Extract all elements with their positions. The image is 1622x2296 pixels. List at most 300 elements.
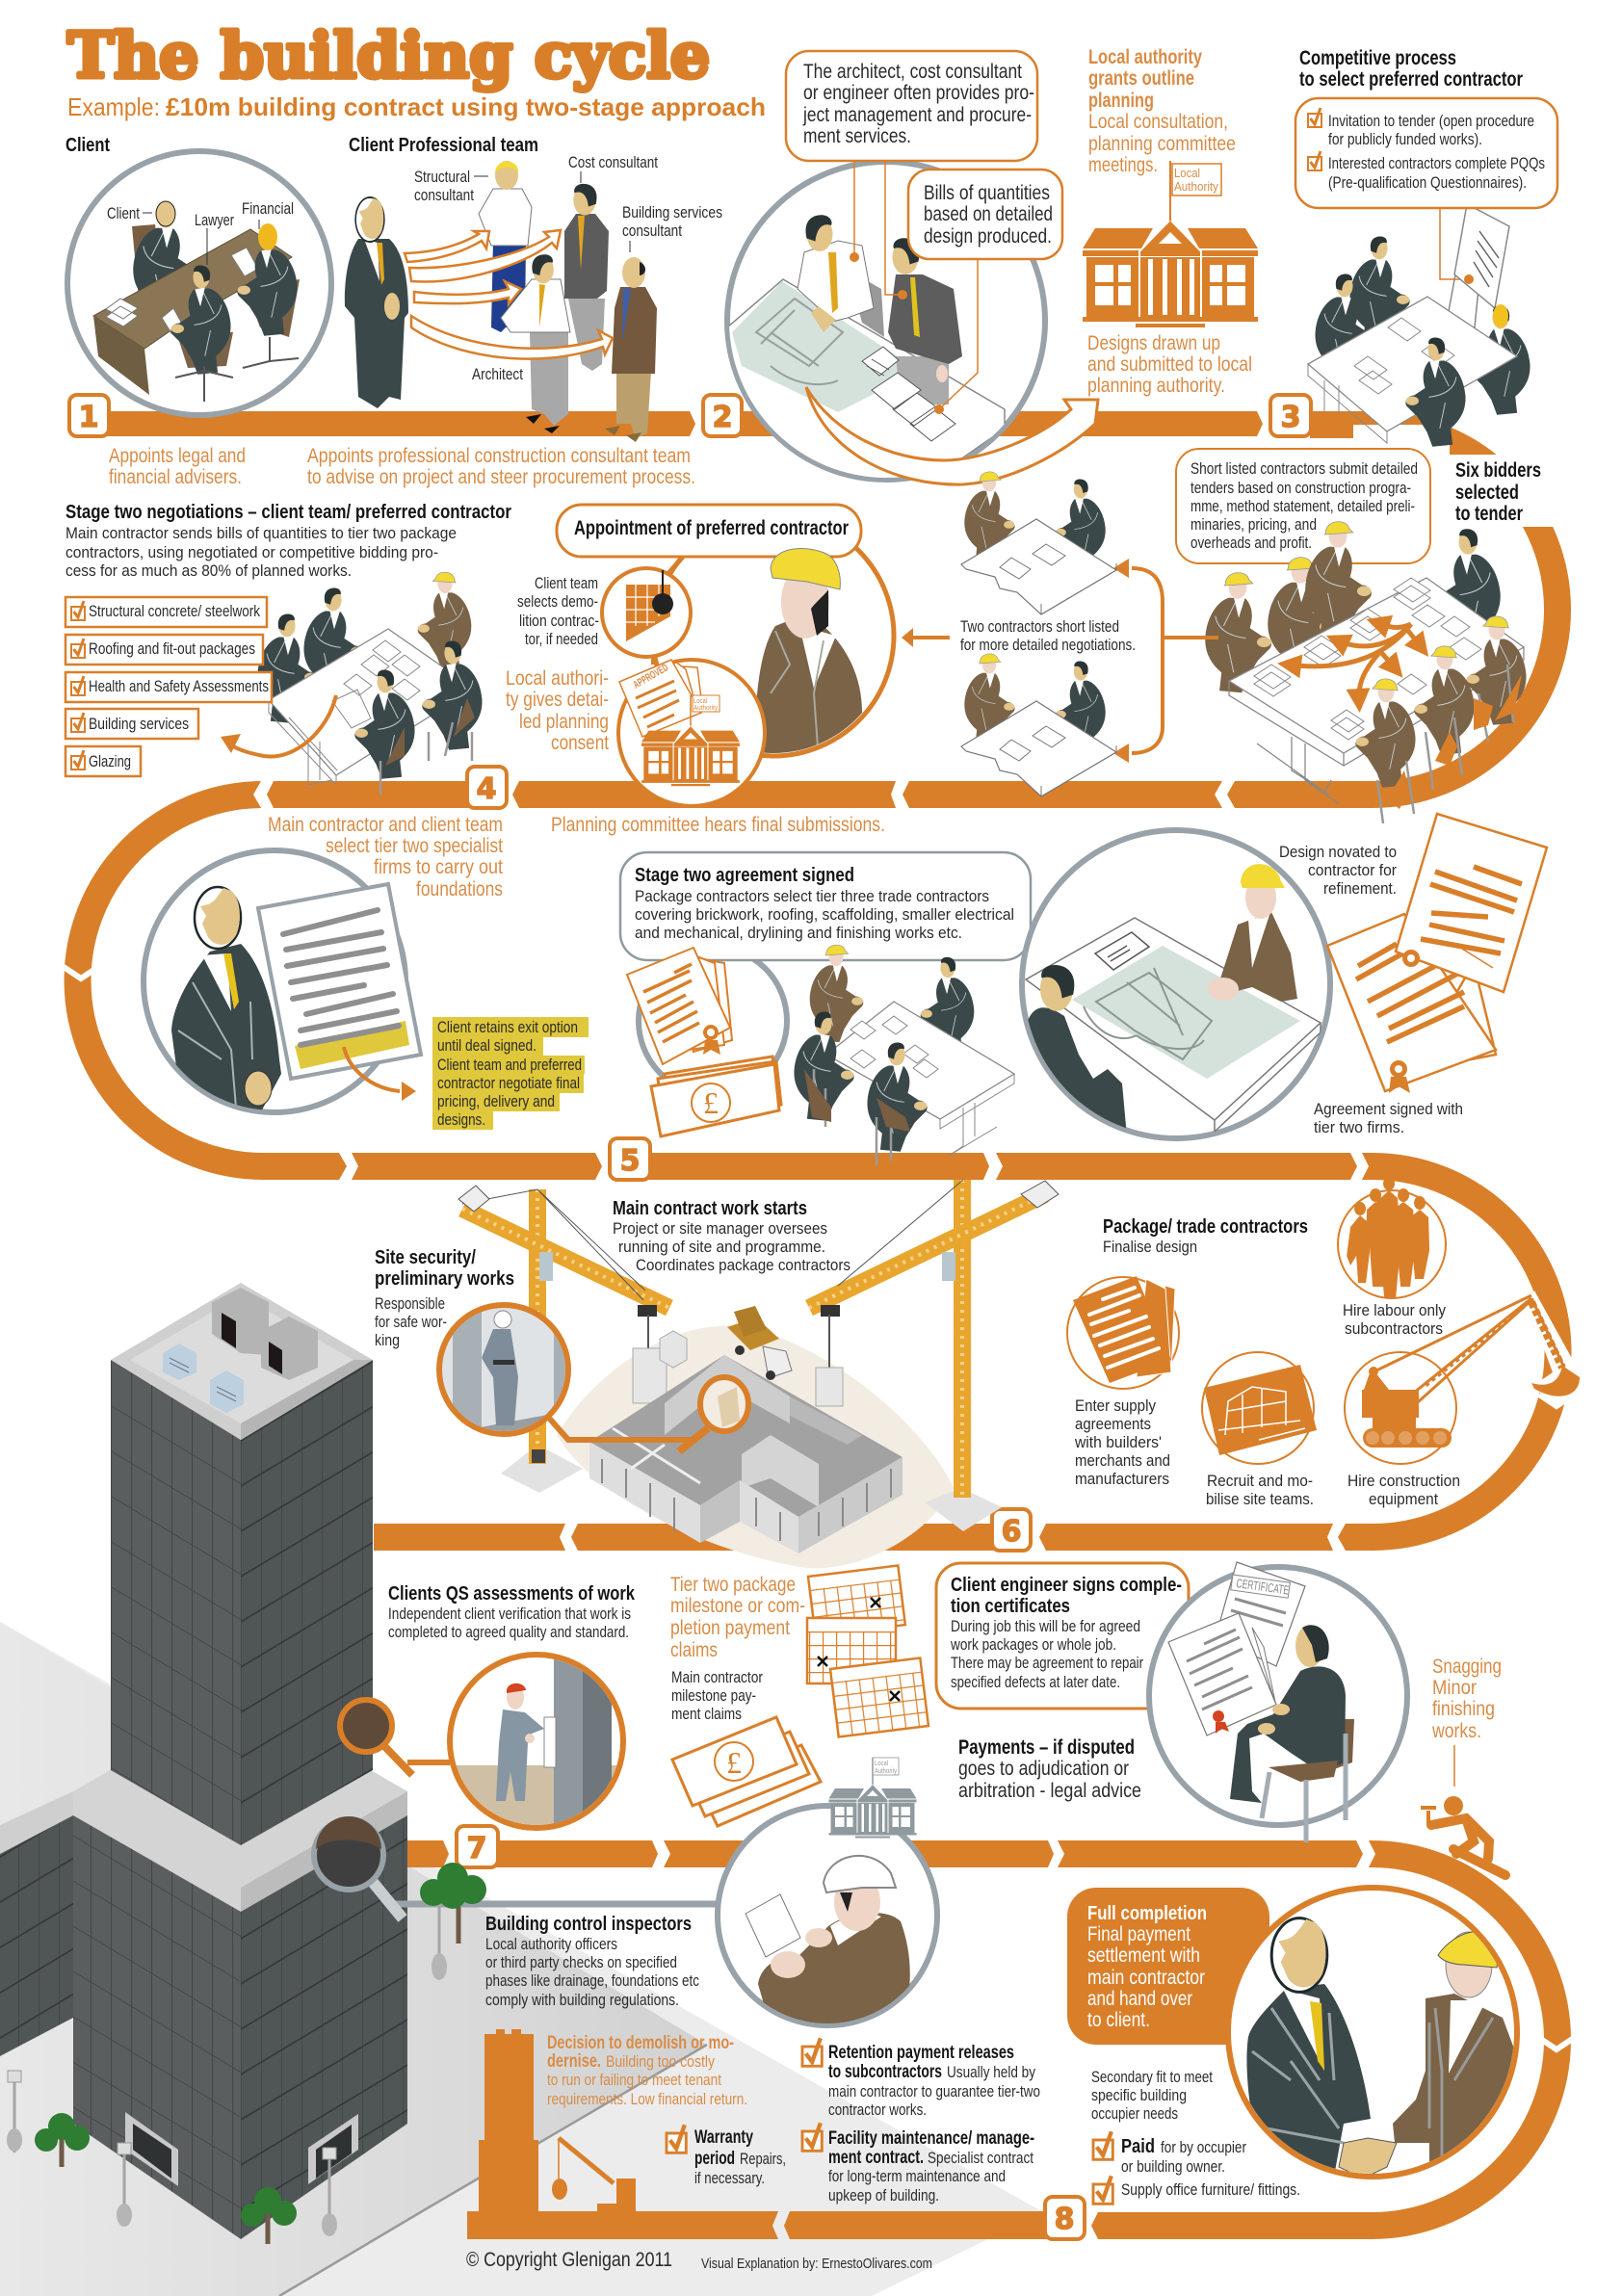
text: local authority: meetings. xyxy=(1088,154,1158,176)
text: design novated: refinement. xyxy=(1323,879,1397,898)
callout: short listed tenders: minaries, pricing, and xyxy=(1190,515,1317,534)
text: designs submitted: Designs drawn up xyxy=(1087,332,1220,354)
person: client handshake xyxy=(1246,1918,1371,2177)
arrow: process to step 3 xyxy=(806,387,1098,484)
text: facility maintenance: Facility maintenance/ manage- xyxy=(828,2128,1034,2149)
text: agreement signed xyxy=(1314,1100,1463,1136)
text: retention payment: to subcontractors xyxy=(828,2062,942,2082)
person: client standing xyxy=(345,197,408,408)
text: snagging: finishing xyxy=(1432,1698,1495,1720)
handshake xyxy=(1339,2138,1397,2179)
callout: exit option highlight: designs. xyxy=(437,1110,485,1129)
text: local authority: grants outline xyxy=(1088,67,1194,90)
arrow: negotiation outcome xyxy=(221,695,336,757)
icon: grey town hall xyxy=(828,1758,917,1838)
roof with plant xyxy=(111,1283,373,1440)
icon: town hall with flag: Authority xyxy=(1174,179,1218,194)
crane: right xyxy=(809,1180,1059,1531)
text: tier two milestone claims xyxy=(670,1574,805,1723)
text: hire equipment: equipment xyxy=(1369,1490,1438,1508)
client labels: Client xyxy=(107,204,140,222)
client labels xyxy=(107,199,294,265)
text: clients QS: Clients QS assessments of work xyxy=(388,1583,636,1605)
text: retention payment xyxy=(802,2038,1040,2119)
panel: negotiation table xyxy=(221,572,483,795)
text: retention payment: contractor works. xyxy=(828,2100,927,2119)
icon: flip chart xyxy=(1445,204,1517,390)
text: local authority consent: Local authori- xyxy=(506,667,609,690)
text: decision to demolish: dernise. xyxy=(547,2051,601,2072)
text: appoints advisers: Appoints legal and xyxy=(109,445,246,467)
text: supply agreements: manufacturers xyxy=(1075,1470,1169,1488)
text: designs submitted: planning authority. xyxy=(1087,375,1225,397)
text: select tier two: Main contractor and client team xyxy=(268,814,503,836)
text: local authority: Local consultation, xyxy=(1088,111,1228,133)
panel: client with contract xyxy=(144,850,421,1117)
heading: six bidders: selected xyxy=(1455,482,1519,504)
text: appoints advisers xyxy=(109,445,246,488)
text: site security: king xyxy=(375,1331,400,1349)
icon: planning consent circle: Local xyxy=(693,698,707,705)
circle: site security xyxy=(439,1300,573,1445)
person: structural consultant xyxy=(479,161,532,332)
text: supply agreements: agreements xyxy=(1075,1415,1151,1433)
text: retention payment: main contractor to guarantee tier-two xyxy=(828,2082,1040,2100)
heading: six bidders: Six bidders xyxy=(1455,459,1541,482)
text: tier two milestone claims: Tier two package xyxy=(670,1574,796,1596)
text: appoints consultant team xyxy=(307,445,695,488)
text: hire equipment: Hire construction xyxy=(1347,1472,1460,1490)
step 7 badge xyxy=(457,1826,498,1867)
text: local authority consent xyxy=(506,667,609,754)
panel: competitive meeting: for publicly funded works). xyxy=(1328,130,1482,148)
text box: final settlement: to client. xyxy=(1087,2009,1150,2031)
text: tier two milestone claims: ment claims xyxy=(671,1705,742,1723)
callout: exit option highlight: Client retains exit option xyxy=(437,1018,578,1036)
callout: exit option highlight: pricing, delivery and xyxy=(437,1092,555,1110)
text: warranty period xyxy=(667,2125,786,2187)
text: two contractors xyxy=(960,617,1136,654)
text: tier two milestone claims: milestone or com- xyxy=(670,1595,805,1617)
text: site security: Responsible xyxy=(375,1294,445,1313)
subtitle: Example: xyxy=(67,92,160,121)
entrances xyxy=(125,2112,358,2186)
text: select tier two: firms to carry out xyxy=(374,856,503,878)
text: payments disputed: arbitration - legal advice xyxy=(958,1780,1141,1802)
text: local authority xyxy=(1088,46,1236,176)
callout: client engineer signs: tion certificates xyxy=(951,1596,1070,1617)
checklist: packages: Roofing and fit-out packages xyxy=(89,639,255,658)
text: client team selects demolition: tor, if needed xyxy=(525,630,598,648)
text: warranty period: if necessary. xyxy=(694,2169,765,2187)
icon: demolition circle xyxy=(602,568,691,657)
panel: competitive meeting xyxy=(1295,98,1557,447)
text: main contract work starts: Main contract work starts xyxy=(613,1198,807,1219)
truck xyxy=(727,1306,792,1380)
icon: snagging worker xyxy=(1421,1745,1505,1875)
text: recruit teams: bilise site teams. xyxy=(1206,1490,1314,1508)
scene: lower negotiation xyxy=(961,654,1116,796)
text: building control inspectors: comply with building regulations. xyxy=(485,1991,679,2009)
text: building control inspectors xyxy=(485,1914,699,2009)
person: cost consultant xyxy=(564,184,609,371)
icon: calendars xyxy=(807,1566,929,1736)
certificate back: CERTIFICATE xyxy=(1236,1576,1290,1598)
step 6 badge xyxy=(992,1509,1031,1551)
circle: QS inspector xyxy=(443,1652,626,1835)
checklist: packages xyxy=(65,597,272,776)
arrows: short listing xyxy=(902,559,1218,763)
callout: architect role xyxy=(786,51,1037,300)
icon: contract pages xyxy=(627,948,732,1064)
building under construction xyxy=(589,1355,903,1553)
text: facility maintenance xyxy=(802,2123,1034,2205)
crane: left xyxy=(458,1186,669,1493)
text box: final settlement xyxy=(1067,1888,1269,2045)
text: building control inspectors: phases like drainage, foundations etc xyxy=(485,1971,699,1990)
text box: final settlement: main contractor xyxy=(1087,1967,1205,1989)
step 5 badge xyxy=(610,1138,650,1180)
arrow: to exit option xyxy=(344,1047,416,1101)
icon: planning consent circle: Authority xyxy=(693,705,718,712)
panel: engineer with certificates xyxy=(1149,1562,1407,1842)
text: main contract work starts: Coordinates package contractors xyxy=(636,1256,850,1274)
callout: appointment of preferred contractor: Appointment of preferred contractor xyxy=(574,517,849,539)
cycle ribbon xyxy=(64,411,1580,2239)
icon: construction equipment xyxy=(1345,1291,1580,1464)
text: tier two milestone claims: claims xyxy=(670,1639,718,1661)
callout: architect role: ment services. xyxy=(803,125,911,147)
text: select tier two xyxy=(268,814,503,900)
heading: stage two negotiations: cess for as much as 80% of planned works. xyxy=(65,561,352,580)
text: recruit teams xyxy=(1206,1472,1314,1508)
text: supply agreements: with builders' xyxy=(1074,1433,1162,1451)
team labels: Architect xyxy=(472,365,523,383)
callout: bills of quantities: Bills of quantities xyxy=(924,182,1050,204)
heading: six bidders xyxy=(1455,459,1541,525)
text box: final settlement: Full completion xyxy=(1087,1903,1207,1924)
callout: short listed tenders: mme, method statement, detailed preli- xyxy=(1190,497,1415,515)
checklist: packages: Building services xyxy=(89,715,189,733)
text: decision to demolish: requirements. Low financial return. xyxy=(547,2090,747,2108)
text: decision to demolish xyxy=(547,2033,747,2108)
footer credits: © Copyright Glenigan 2011 xyxy=(466,2249,672,2271)
text: package trade contractors: Finalise design xyxy=(1103,1238,1197,1256)
text: building control inspectors: or third party checks on specified xyxy=(485,1953,677,1971)
icon: banknotes xyxy=(651,1057,781,1136)
text: payments disputed: Payments – if disputed xyxy=(958,1736,1135,1759)
text: decision to demolish: Building too costly xyxy=(606,2052,715,2071)
text: warranty period: Repairs, xyxy=(740,2150,786,2168)
text: client team selects demolition: selects demo- xyxy=(517,592,598,611)
person: architect xyxy=(501,254,570,433)
text: agreement signed: tier two firms. xyxy=(1314,1118,1404,1136)
text: supply agreements xyxy=(1074,1396,1170,1488)
text: clients QS: completed to agreed quality and standard. xyxy=(388,1623,629,1641)
step 2 badge: 2 xyxy=(713,401,732,434)
text: local authority: planning committee xyxy=(1088,133,1236,155)
text: package trade contractors: Package/ trade contractors xyxy=(1103,1216,1308,1238)
person: white shirt engineer xyxy=(798,215,884,337)
panel: stage two agreement: Stage two agreement signed xyxy=(635,865,854,886)
callout: architect role: The architect, cost consultant xyxy=(803,61,1022,83)
text: local authority consent: led planning xyxy=(519,711,609,733)
text: select tier two: select tier two specialist xyxy=(326,835,503,857)
panel: building control inspector xyxy=(718,1806,937,2027)
text: two contractors: for more detailed negotiations. xyxy=(960,636,1136,654)
checklist: packages: Glazing xyxy=(89,752,131,770)
heading: stage two negotiations: Main contractor sends bills of quantities to tier two package xyxy=(65,524,457,542)
text: building control inspectors: Building control inspectors xyxy=(485,1914,692,1935)
arrows: appoints team xyxy=(405,230,613,359)
contractor head with hard hat xyxy=(771,549,840,639)
step 1 badge xyxy=(69,395,109,436)
heading: competitive process: Competitive process xyxy=(1299,47,1456,69)
text: appoints advisers: financial advisers. xyxy=(109,466,242,488)
icon: banknotes payment xyxy=(672,1717,821,1826)
text: appoints consultant team: to advise on project and steer procurement process. xyxy=(307,466,695,488)
text: retention payment: Usually held by xyxy=(947,2063,1035,2081)
lens: QS assessment xyxy=(340,1700,450,1775)
text: client team selects demolition: lition contrac- xyxy=(519,612,599,630)
icon: contract document xyxy=(258,884,421,1079)
text: snagging: Minor xyxy=(1432,1677,1477,1699)
text box: final settlement: Final payment xyxy=(1087,1923,1190,1945)
text: main contract work starts xyxy=(613,1198,850,1274)
text: design novated xyxy=(1279,843,1397,898)
text: package trade contractors xyxy=(1103,1216,1308,1256)
scene: signing table xyxy=(794,945,1014,1165)
panel: stage two agreement: and mechanical, drylining and finishing works etc. xyxy=(635,924,962,942)
text: planning committee: Planning committee hears final submissions. xyxy=(551,814,885,836)
step 2 badge xyxy=(703,395,742,436)
text: supply agreements: Enter supply xyxy=(1075,1396,1156,1415)
text: clients QS: Independent client verification that work is xyxy=(388,1605,631,1623)
team labels xyxy=(414,153,722,383)
panel: client professional team xyxy=(345,153,722,442)
callout: short listed tenders xyxy=(1176,449,1430,563)
text box: final settlement: settlement with xyxy=(1087,1944,1200,1967)
panel: competitive meeting: Interested contractors complete PQQs xyxy=(1328,154,1545,172)
callout: architect role: or engineer often provides pro- xyxy=(803,82,1034,104)
isometric ground xyxy=(0,1622,1043,2296)
callout: exit option highlight: Client team and preferred xyxy=(437,1056,582,1074)
step 8 badge: 8 xyxy=(1055,2203,1074,2236)
subtitle: £10m building contract using two-stage approach xyxy=(166,92,766,121)
panel: preferred contractor bust xyxy=(654,547,896,759)
text: agreement signed: Agreement signed with xyxy=(1314,1100,1463,1118)
text: local authority: planning xyxy=(1088,90,1154,112)
scene: upper negotiation xyxy=(961,472,1116,614)
heading: stage two negotiations xyxy=(65,502,511,580)
text: payments disputed: goes to adjudication or xyxy=(958,1758,1129,1780)
callout: bills of quantities xyxy=(908,170,1062,414)
street trees and lamps xyxy=(7,1863,486,2244)
text: recruit teams: Recruit and mo- xyxy=(1207,1472,1313,1490)
step 8 badge xyxy=(1045,2197,1085,2239)
person: contractor handshake xyxy=(1393,1932,1515,2162)
text: facility maintenance: Specialist contract xyxy=(928,2149,1033,2167)
text: secondary fit xyxy=(1091,2068,1213,2123)
callout: short listed tenders: tenders based on construction progra- xyxy=(1190,479,1411,497)
panel: stage two agreement: Package contractors select tier three trade contractors xyxy=(635,887,989,905)
lens: building control xyxy=(314,1816,722,1918)
client labels: Lawyer xyxy=(195,211,234,229)
icon: demolition of building xyxy=(479,2029,636,2215)
heading: six bidders: to tender xyxy=(1455,503,1523,525)
panel: tender table xyxy=(1205,522,1527,823)
text: design novated: Design novated to xyxy=(1279,843,1397,861)
team labels: Structural xyxy=(414,168,470,186)
lens: site detail xyxy=(547,1377,748,1451)
text: snagging: works. xyxy=(1431,1720,1481,1742)
text: decision to demolish: Decision to demolish or mo- xyxy=(547,2033,734,2053)
text: hire labour xyxy=(1343,1301,1446,1338)
text: designs submitted: and submitted to local xyxy=(1087,353,1252,376)
team labels: consultant xyxy=(414,186,474,204)
text: secondary fit: specific building xyxy=(1091,2086,1187,2104)
text: main contract work starts: running of site and programme. xyxy=(618,1238,825,1256)
certificate back xyxy=(1216,1562,1305,1666)
callout: client engineer signs: During job this will be for agreed xyxy=(951,1617,1140,1635)
panel: full completion xyxy=(1067,1888,1517,2179)
checklist: paid and supply: Supply office furniture/ fittings. xyxy=(1121,2180,1300,2199)
text: decision to demolish: to run or failing to meet tenant xyxy=(547,2071,721,2089)
team labels: consultant xyxy=(622,222,682,240)
icon: signed agreements xyxy=(1327,814,1547,1093)
panel: competitive meeting: Invitation to tender (open procedure xyxy=(1328,112,1534,130)
icon: banknotes payment: £ xyxy=(726,1745,742,1780)
panel: competitive meeting: (Pre-qualification Questionnaires). xyxy=(1328,173,1527,192)
footer credits: Visual Explanation by: ErnestoOlivares.com xyxy=(701,2256,932,2272)
text: two contractors: Two contractors short listed xyxy=(960,617,1119,636)
text: client team selects demolition xyxy=(517,574,599,648)
text: warranty period: period xyxy=(694,2149,735,2169)
text: secondary fit: occupier needs xyxy=(1091,2104,1178,2123)
text: supply agreements: merchants and xyxy=(1075,1451,1170,1470)
text: select tier two: foundations xyxy=(416,878,503,900)
text: local authority: Local authority xyxy=(1088,46,1202,68)
callout: client engineer signs xyxy=(936,1563,1189,1709)
step 4 badge: 4 xyxy=(477,772,496,806)
building: tower xyxy=(73,1283,407,2239)
callout: client engineer signs: specified defects at later date. xyxy=(951,1673,1120,1691)
callout: bills of quantities: design produced. xyxy=(924,225,1052,248)
text: secondary fit: Secondary fit to meet xyxy=(1091,2068,1213,2086)
checklist: packages: Structural concrete/ steelwork xyxy=(89,602,260,620)
panel: stage two agreement xyxy=(620,852,1031,1165)
callout: exit option highlight: contractor negotiate final xyxy=(437,1074,580,1092)
text: payments disputed xyxy=(958,1736,1141,1802)
client labels: Financial xyxy=(242,199,294,218)
text: retention payment: Retention payment releases xyxy=(828,2043,1014,2063)
person: grey jacket consultant xyxy=(888,238,962,404)
callout: short listed tenders: Short listed contractors submit detailed xyxy=(1190,459,1418,478)
icon: planning consent circle xyxy=(618,657,765,806)
step 1 badge: 1 xyxy=(79,401,98,434)
text: facility maintenance: ment contract. xyxy=(828,2148,924,2168)
text: hire equipment xyxy=(1347,1472,1460,1508)
text: site security: Site security/ xyxy=(375,1247,476,1268)
step 7 badge: 7 xyxy=(467,1832,486,1866)
checklist: paid and supply: or building owner. xyxy=(1121,2157,1225,2176)
callout: architect role: ject management and procure- xyxy=(802,104,1032,126)
icon: supply documents xyxy=(1067,1276,1179,1389)
callout: exit option highlight xyxy=(432,1017,589,1130)
callout: client engineer signs: work packages or whole job. xyxy=(950,1635,1116,1654)
icon: grey town hall: Local xyxy=(875,1761,888,1767)
checklist: packages: Health and Safety Assessments xyxy=(89,677,269,695)
footer credits xyxy=(466,2249,932,2272)
text: main contract work starts: Project or site manager oversees xyxy=(613,1219,827,1238)
heading: competitive process xyxy=(1299,47,1523,91)
text: local authority consent: consent xyxy=(551,732,609,754)
panel: stage two agreement: covering brickwork, roofing, scaffolding, smaller electrical xyxy=(635,905,1014,924)
text: snagging xyxy=(1431,1656,1502,1742)
text: hire labour: Hire labour only xyxy=(1343,1301,1446,1319)
text: hire labour: subcontractors xyxy=(1345,1319,1443,1338)
callout: client engineer signs: There may be agreement to repair xyxy=(951,1654,1143,1672)
icon: planning consent circle: APPROVED xyxy=(632,662,670,691)
step 4 badge xyxy=(467,767,507,808)
team labels: Cost consultant xyxy=(568,153,658,171)
team labels: Building services xyxy=(622,203,722,222)
step 6 badge: 6 xyxy=(1002,1515,1021,1549)
callout: client engineer signs: Client engineer signs comple- xyxy=(951,1575,1182,1596)
heading: client professional team: Client Professional team xyxy=(349,135,538,156)
text: warranty period: Warranty xyxy=(694,2127,753,2148)
icon: site plan xyxy=(1202,1352,1317,1464)
text: client team selects demolition: Client team xyxy=(535,574,598,592)
text: tier two milestone claims: pletion payment xyxy=(670,1617,790,1639)
callout: short listed tenders: overheads and profit. xyxy=(1190,534,1312,552)
step 3 badge xyxy=(1270,395,1311,436)
text: appoints consultant team: Appoints professional construction consultant team xyxy=(307,445,691,467)
text: site security: for safe wor- xyxy=(375,1313,447,1331)
panel: design novation circle xyxy=(1021,830,1330,1138)
step 5 badge: 5 xyxy=(620,1144,640,1178)
icon: grey town hall: Authority xyxy=(875,1768,897,1775)
building: left low block xyxy=(0,1791,73,2056)
text box: final settlement: and hand over xyxy=(1087,1988,1192,2010)
title: The building cycle xyxy=(67,19,710,92)
text: site security: preliminary works xyxy=(375,1268,514,1290)
step 3 badge: 3 xyxy=(1281,401,1300,434)
text: site security xyxy=(375,1247,514,1349)
heading: stage two negotiations: Stage two negotiations – client team/ preferred contractor xyxy=(65,502,511,523)
callout: exit option highlight: until deal signed. xyxy=(437,1036,536,1055)
callout: bills of quantities: based on detailed xyxy=(924,203,1053,225)
heading: client: Client xyxy=(65,135,110,156)
text: designs submitted xyxy=(1087,332,1252,397)
text: facility maintenance: upkeep of building. xyxy=(828,2186,939,2205)
person: building services consultant xyxy=(605,257,657,442)
panel: client circle xyxy=(67,151,331,415)
text: snagging: Snagging xyxy=(1432,1656,1502,1678)
checklist: paid and supply: Paid xyxy=(1121,2136,1155,2157)
text: building control inspectors: Local authority officers xyxy=(485,1935,617,1953)
heading: stage two negotiations: contractors, using negotiated or competitive bidding pro- xyxy=(65,543,438,561)
panel: design circle xyxy=(727,162,1098,491)
text: design novated: contractor for xyxy=(1308,861,1397,879)
text: tier two milestone claims: milestone pay- xyxy=(671,1686,756,1705)
icon: town hall with flag: Local xyxy=(1174,166,1200,180)
icon: labour circle xyxy=(1338,1177,1446,1298)
icon: banknotes: £ xyxy=(703,1085,719,1120)
text: clients QS xyxy=(388,1583,636,1641)
callout: appointment of preferred contractor xyxy=(557,505,861,578)
text: facility maintenance: for long-term maintenance and xyxy=(828,2167,1006,2185)
